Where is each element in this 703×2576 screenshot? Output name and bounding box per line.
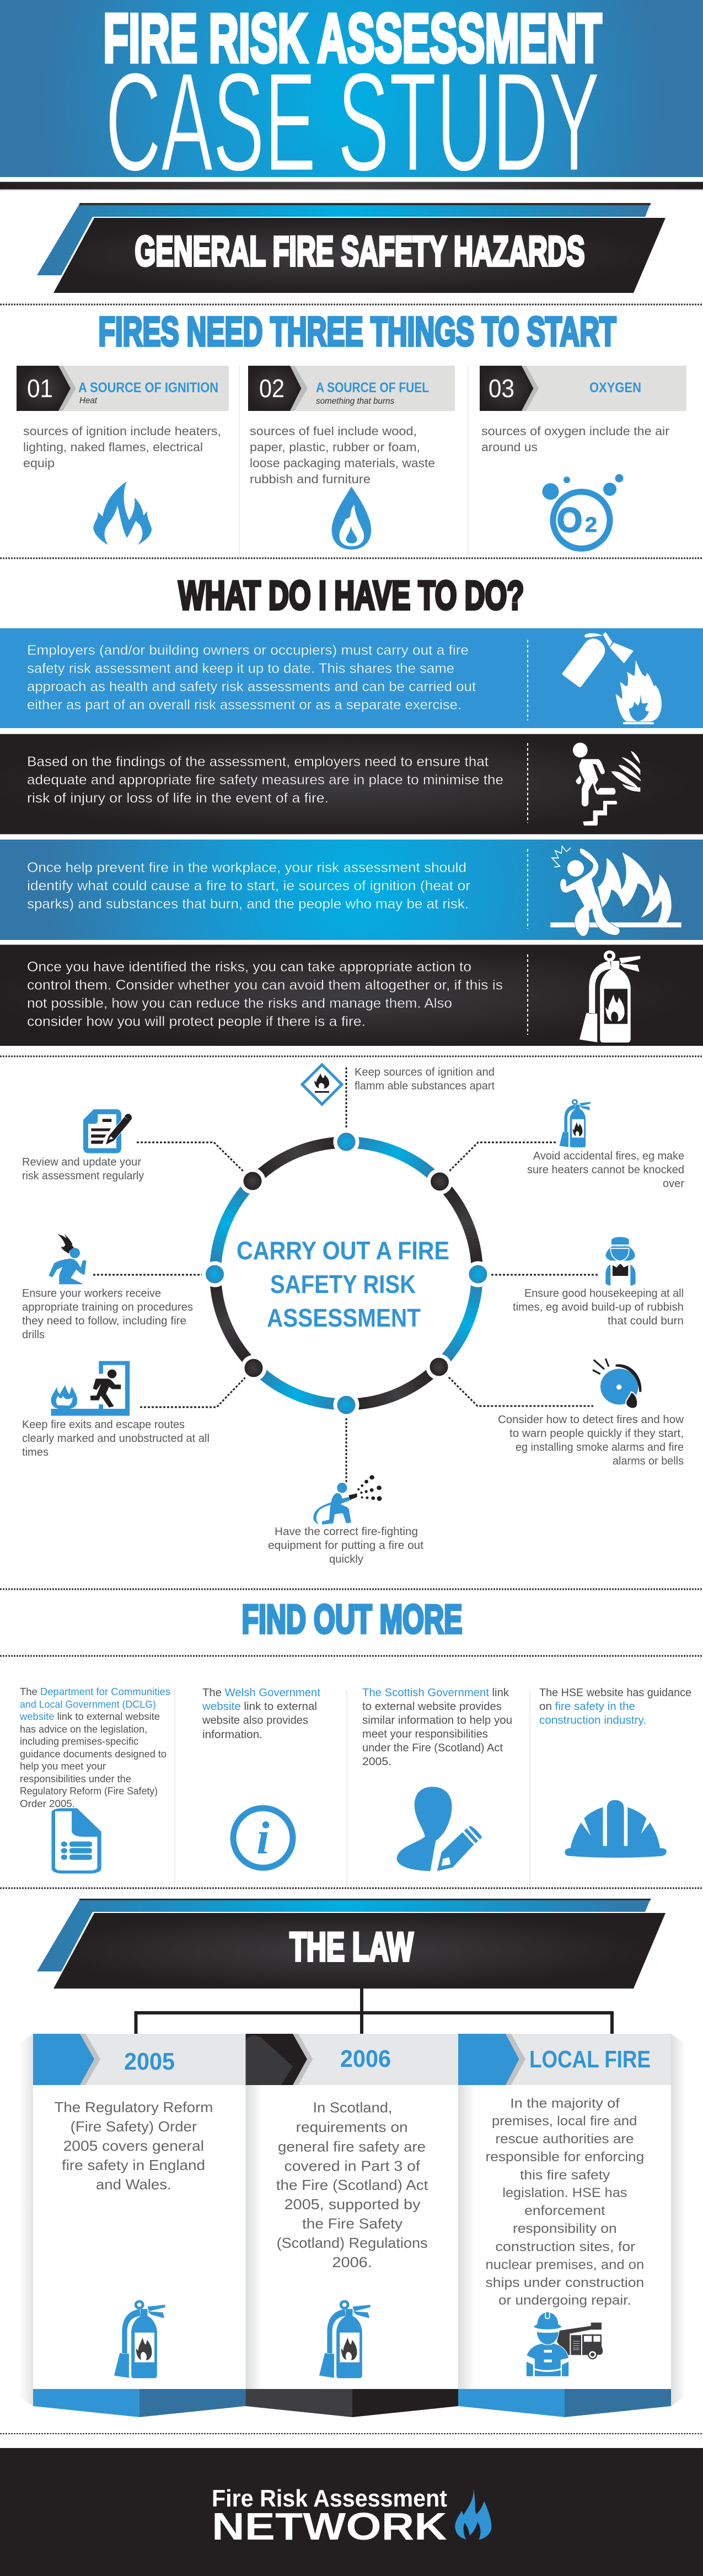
text: construction sites, for	[495, 2240, 635, 2254]
icon: flame	[93, 482, 152, 545]
banner: the law	[37, 1899, 666, 1989]
text: website also provides	[202, 1714, 308, 1727]
label: ignition	[355, 1066, 495, 1092]
text: the Fire (Scotland) Act	[276, 2177, 428, 2193]
text	[362, 1686, 512, 1768]
text: either as part of an overall risk assessment or as a separate exercise.	[27, 697, 461, 713]
text: website link to external	[202, 1700, 317, 1713]
text	[27, 860, 470, 912]
label: training: they need to follow, including fire	[22, 1314, 186, 1327]
footer: NETWORK	[212, 2505, 447, 2548]
panel: row 2	[0, 734, 703, 835]
centre text	[237, 1236, 449, 1332]
label: equipment: equipment for putting a fire out	[268, 1539, 423, 1552]
icon: extinguisher	[114, 2300, 165, 2379]
icon: flammable diamond	[302, 1065, 342, 1104]
label: housekeeping: that could burn	[608, 1314, 684, 1327]
folded foot	[246, 2389, 352, 2417]
text: identify what could cause a fire to start, ie sources of ignition (heat or	[27, 878, 470, 894]
label: training	[22, 1287, 193, 1341]
text: and Wales.	[96, 2176, 171, 2193]
text: Once you have identified the risks, you can take appropriate action to	[27, 959, 471, 975]
text: adequate and appropriate fire safety measures are in place to minimise the	[27, 772, 503, 788]
text	[202, 1686, 320, 1741]
icon: information: i	[256, 1813, 270, 1864]
text: (Fire Safety) Order	[71, 2118, 197, 2135]
text: The Regulatory Reform	[54, 2099, 213, 2115]
icon: escaping on stairs	[573, 742, 641, 826]
text: construction industry.	[539, 1714, 646, 1727]
panel: row 1	[0, 628, 703, 728]
text: rescue authorities are	[495, 2131, 634, 2147]
number: 02	[259, 374, 285, 403]
icon: fuel drop	[332, 487, 371, 549]
title: A SOURCE OF IGNITION	[78, 380, 218, 396]
icon: person with pencil	[397, 1787, 482, 1871]
label: equipment: quickly	[329, 1553, 364, 1565]
label: accidental fires: over	[663, 1177, 684, 1190]
law cards	[19, 2034, 685, 2417]
subtitle: Heat	[79, 396, 98, 405]
icon: review document	[83, 1109, 132, 1153]
panel: HSE	[539, 1686, 691, 1858]
text: approach as health and safety risk assessments and can be carried out	[27, 679, 476, 694]
text: consider how you will protect people if there is a fire.	[27, 1014, 366, 1029]
label: detect	[498, 1413, 684, 1467]
label: review: Review and update your	[22, 1156, 141, 1168]
label: equipment	[268, 1525, 423, 1565]
text	[19, 1686, 170, 1809]
icon: oxygen: 2	[585, 514, 597, 537]
label: training: Ensure your workers receive	[22, 1287, 161, 1300]
heading: find out more: FIND OUT MORE	[242, 1597, 462, 1642]
panel: row 3	[0, 840, 703, 940]
folded foot	[458, 2389, 565, 2417]
panel: Scottish Government	[362, 1686, 512, 1871]
text: 2005 covers general	[63, 2137, 204, 2154]
label: detect: to warn people quickly if they start,	[509, 1427, 684, 1440]
header banner	[0, 0, 703, 201]
text	[250, 424, 435, 486]
panel: 2005	[33, 2034, 246, 2417]
icon: extinguisher	[319, 2300, 371, 2379]
label: exits: Keep fire exits and escape routes	[22, 1418, 185, 1431]
number: 03	[489, 374, 514, 403]
text	[27, 643, 476, 713]
centre text: SAFETY RISK	[270, 1270, 416, 1298]
logo flame	[455, 2489, 491, 2540]
heading: what do i have to do: WHAT DO I HAVE TO DO?	[179, 574, 524, 618]
banner: general fire safety hazards	[37, 203, 666, 293]
title: OXYGEN	[589, 380, 641, 396]
text: Regulatory Reform (Fire Safety)	[20, 1785, 158, 1797]
connectors	[93, 1067, 599, 1483]
text: meet your responsibilities	[362, 1728, 488, 1740]
text: website link to external website	[19, 1711, 160, 1722]
icon: firefighter with hose	[313, 1475, 382, 1525]
text	[485, 2096, 644, 2308]
text	[539, 1686, 691, 1727]
text: on fire safety in the	[539, 1700, 635, 1713]
label: detect: alarms or bells	[613, 1455, 684, 1467]
text: responsible for enforcing	[485, 2150, 644, 2165]
label: housekeeping	[513, 1287, 684, 1327]
text: The Welsh Government	[202, 1686, 320, 1699]
card shadows	[19, 2034, 33, 2406]
label: detect: Consider how to detect fires and how	[498, 1413, 684, 1426]
text: ships under construction	[485, 2275, 644, 2290]
text: rubbish and furniture	[250, 472, 371, 486]
icon: alarm bell	[593, 1359, 641, 1409]
text: similar information to help you	[362, 1714, 512, 1727]
nodes	[204, 1131, 489, 1416]
number: 01	[27, 374, 53, 403]
text: The Scottish Government link	[362, 1686, 509, 1699]
label: review	[22, 1156, 144, 1182]
heading: THE LAW	[290, 1925, 414, 1969]
label: detect: eg installing smoke alarms and fire	[516, 1441, 684, 1453]
text: including premises-specific	[20, 1735, 138, 1747]
icon: exit and fire	[51, 1361, 130, 1416]
centre text: CARRY OUT A FIRE	[237, 1236, 449, 1265]
text: fire safety in England	[62, 2157, 205, 2173]
centre text: ASSESSMENT	[267, 1303, 421, 1332]
text: In Scotland,	[313, 2099, 393, 2116]
text: nuclear premises, and on	[485, 2257, 644, 2273]
text: 2005, supported by	[285, 2196, 420, 2212]
text: 2005.	[362, 1755, 391, 1768]
panel: Welsh Government	[202, 1686, 320, 1868]
label: exits: times	[22, 1446, 49, 1458]
footer	[0, 2448, 703, 2576]
panel: source of fuel	[248, 366, 455, 549]
label: accidental fires: Avoid accidental fires, eg make	[533, 1150, 684, 1162]
subtitle: something that burns	[316, 397, 394, 406]
text: The Department for Communities	[20, 1686, 170, 1697]
text: sources of oxygen include the air	[481, 424, 669, 438]
text: (Scotland) Regulations	[277, 2235, 428, 2251]
text: covered in Part 3 of	[285, 2158, 421, 2174]
panel: source of ignition	[17, 366, 229, 545]
text: not possible, how you can reduce the risks and manage them. Also	[27, 996, 452, 1011]
icon: information	[233, 1808, 293, 1868]
title: LOCAL FIRE	[529, 2046, 651, 2073]
text: guidance documents designed to	[20, 1748, 167, 1760]
text	[23, 424, 221, 470]
text: legislation. HSE has	[502, 2185, 627, 2200]
panel: local fire	[458, 2034, 671, 2417]
text: help you meet your	[20, 1760, 106, 1772]
icon: oxygen	[543, 474, 623, 548]
text: responsibilities under the	[20, 1773, 131, 1784]
ring	[215, 1142, 477, 1404]
text: risk of injury or loss of life in the event of a fire.	[27, 790, 329, 806]
icon: hard hat	[565, 1800, 667, 1858]
icon: extinguisher	[579, 950, 641, 1043]
label: accidental fires	[527, 1150, 684, 1190]
label: ignition: Keep sources of ignition and	[355, 1066, 495, 1078]
label: ignition: flamm able substances apart	[355, 1079, 495, 1092]
text: control them. Consider whether you can avoid them altogether or, if this is	[27, 977, 503, 993]
label: accidental fires: sure heaters cannot be knocked	[527, 1163, 684, 1176]
icon: running worker	[49, 1234, 87, 1284]
folded foot	[33, 2389, 139, 2417]
text	[27, 959, 503, 1029]
text	[27, 754, 503, 806]
text: Order 2005.	[20, 1798, 75, 1809]
text: 2006.	[332, 2254, 372, 2270]
text: premises, local fire and	[492, 2114, 637, 2129]
text	[276, 2099, 428, 2270]
icon: person falling before flames	[550, 846, 681, 936]
label: housekeeping: times, eg avoid build-up of rubbish	[513, 1301, 684, 1313]
year: 2006	[340, 2045, 391, 2072]
text: general fire safety are	[278, 2138, 426, 2155]
text: equip	[23, 456, 55, 470]
icon: extinguisher on fire	[562, 632, 662, 724]
label: exits	[22, 1418, 210, 1458]
label: review: risk assessment regularly	[22, 1169, 144, 1182]
icon: oxygen: O	[557, 501, 582, 539]
icon: document	[51, 1808, 101, 1873]
logo text: Fire Risk Assessment	[212, 2485, 447, 2512]
text: paper, plastic, rubber or foam,	[250, 440, 420, 454]
label: training: drills	[22, 1328, 45, 1341]
text: Once help prevent fire in the workplace, your risk assessment should	[27, 860, 466, 875]
text	[54, 2099, 213, 2193]
text: under the Fire (Scotland) Act	[362, 1741, 503, 1754]
text: requirements on	[296, 2119, 408, 2135]
text	[481, 424, 669, 454]
text: lighting, naked flames, electrical	[23, 440, 203, 454]
label: training: appropriate training on procedures	[22, 1301, 193, 1313]
text: has advice on the legislation,	[20, 1723, 147, 1735]
label: exits: clearly marked and unobstructed at all	[22, 1432, 210, 1445]
icon: firefighter and truck	[526, 2312, 603, 2376]
text: enforcement	[524, 2203, 605, 2219]
text: this fire safety	[520, 2168, 610, 2183]
label: equipment: Have the correct fire-fighting	[275, 1525, 418, 1538]
panel: DCLG	[19, 1686, 170, 1873]
text: safety risk assessment and keep it up to date. This shares the same	[27, 661, 454, 676]
panel: oxygen	[480, 366, 686, 548]
text: loose packaging materials, waste	[250, 456, 435, 470]
title: A SOURCE OF FUEL	[316, 380, 429, 396]
text: In the majority of	[510, 2096, 620, 2111]
icon: housekeeper	[605, 1237, 636, 1285]
text: and Local Government (DCLG)	[20, 1698, 156, 1710]
text: The HSE website has guidance	[539, 1686, 691, 1699]
text: sources of fuel include wood,	[250, 424, 417, 438]
text: to external website provides	[362, 1700, 502, 1713]
year: 2005	[124, 2048, 175, 2075]
icon: small extinguisher	[559, 1099, 591, 1147]
connector lines	[136, 1989, 612, 2034]
label: housekeeping: Ensure good housekeeping at all	[524, 1287, 684, 1300]
dark strip	[0, 181, 703, 190]
text: the Fire Safety	[302, 2215, 403, 2232]
text: around us	[481, 440, 538, 454]
text: or undergoing repair.	[498, 2293, 631, 2308]
panel: row 4	[0, 944, 703, 1046]
text: responsibility on	[513, 2221, 617, 2236]
text: sources of ignition include heaters,	[23, 424, 221, 438]
text: sparks) and substances that burn, and the people who may be at risk.	[27, 896, 469, 912]
panel: 2006	[246, 2034, 458, 2417]
diagram: carry out a fire safety risk assessment	[22, 1065, 684, 1565]
text: information.	[202, 1728, 262, 1741]
text: Based on the findings of the assessment, employers need to ensure that	[27, 754, 489, 769]
text: Employers (and/or building owners or occupiers) must carry out a fire	[27, 643, 469, 658]
